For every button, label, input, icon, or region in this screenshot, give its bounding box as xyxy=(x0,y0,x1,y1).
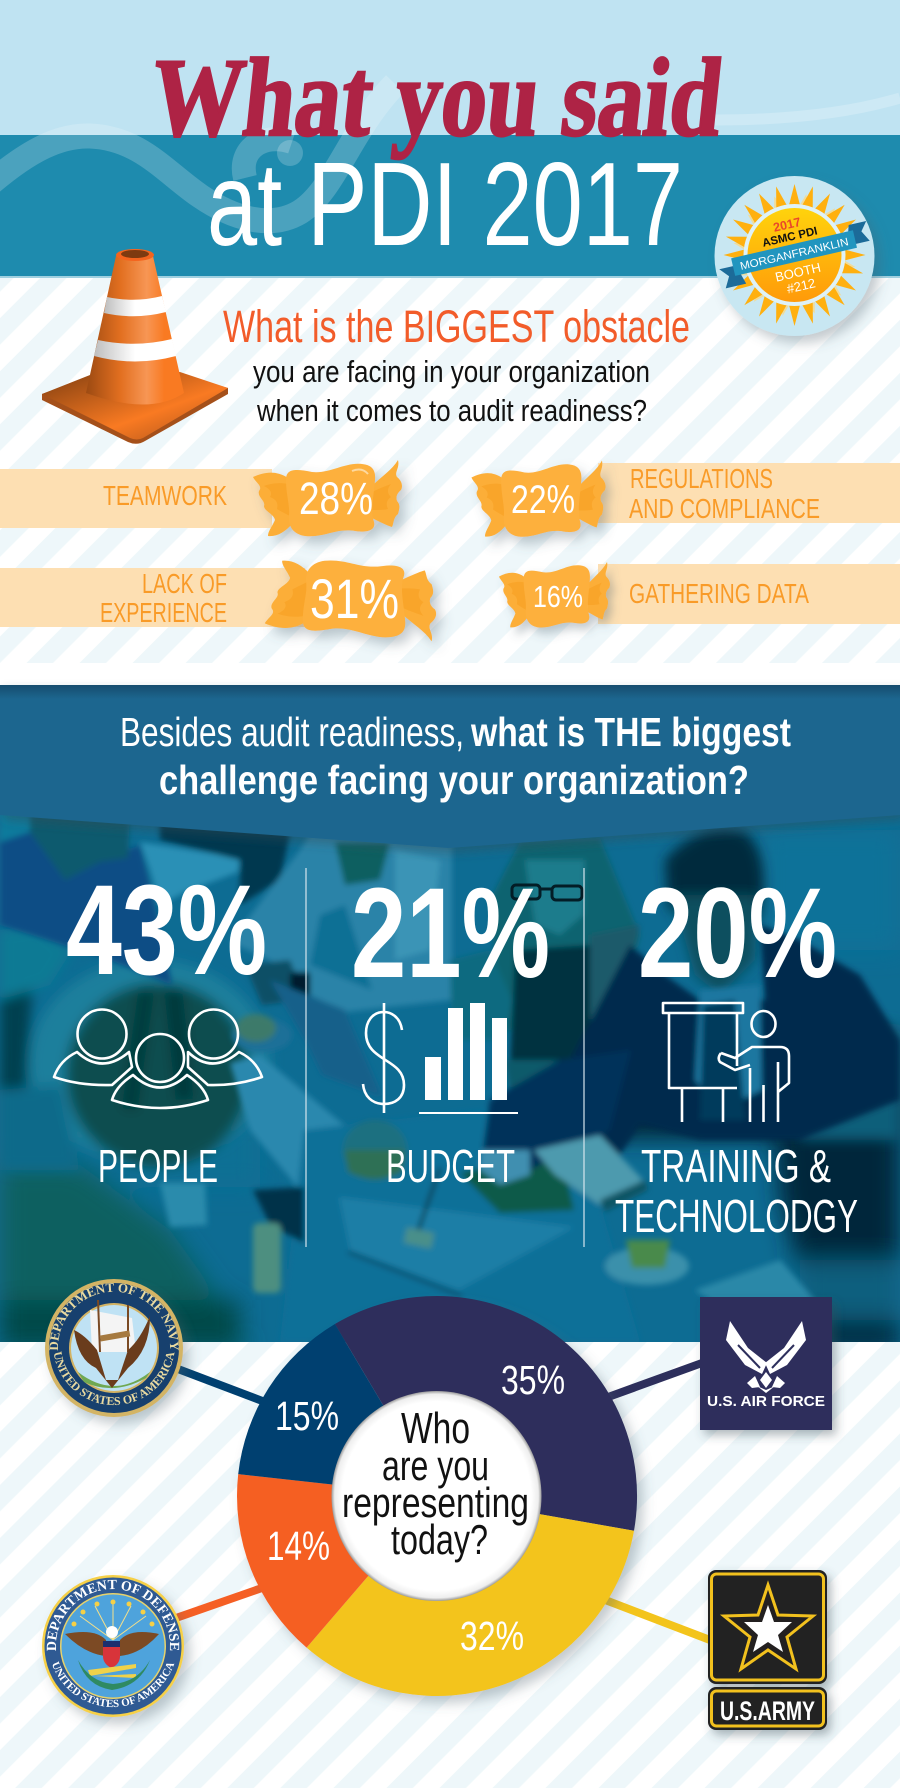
divider lines xyxy=(306,868,584,1247)
stat: 43% people: PEOPLE xyxy=(98,1140,218,1192)
stat: 21% budget: 21% xyxy=(351,862,550,1005)
badge: MorganFranklin booth sun: ASMC PDI xyxy=(761,225,819,250)
badge: MorganFranklin booth sun: BOOTH xyxy=(774,260,822,285)
table area xyxy=(280,1110,640,1342)
label: 15%: 15% xyxy=(275,1393,339,1439)
center question: today? xyxy=(391,1516,488,1563)
icon: traffic cone xyxy=(42,249,228,444)
label: 35%: 35% xyxy=(501,1357,565,1403)
connector: navy xyxy=(178,1369,265,1402)
logo: U.S. Air Force: U.S. AIR FORCE xyxy=(707,1393,825,1410)
bar: regulations and compliance 22%: REGULATIONS xyxy=(630,463,773,494)
stat: 21% budget: BUDGET xyxy=(386,1140,515,1192)
stat: 20% training and technology: 20% xyxy=(638,862,837,1005)
woman right xyxy=(490,838,640,1030)
badge: MorganFranklin booth sun: #212 xyxy=(785,275,817,296)
left dark sliver and cup xyxy=(253,1187,304,1243)
title: What you said: What you said xyxy=(145,36,728,160)
logo: Department of the Navy seal xyxy=(45,1279,194,1430)
icon: people xyxy=(54,1010,262,1108)
man head and right person xyxy=(665,829,764,920)
label: 14%: 14% xyxy=(267,1523,330,1569)
logo: U.S. Army xyxy=(708,1570,827,1730)
heading: biggest obstacle question xyxy=(223,301,690,428)
center question: are you xyxy=(382,1442,489,1489)
stat: 43% people xyxy=(54,859,267,1192)
bar: gathering data 16%: GATHERING DATA xyxy=(629,578,809,609)
bar: regulations and compliance 22%: 22% xyxy=(511,478,575,522)
label: 32%: 32% xyxy=(460,1613,524,1659)
panel: obstacle bars xyxy=(0,460,900,641)
heading: biggest obstacle question: you are facing in your organization xyxy=(253,354,650,389)
panel: challenge heading band xyxy=(0,685,900,848)
bar: teamwork 28%: TEAMWORK xyxy=(103,480,227,511)
connector: army xyxy=(600,1598,710,1640)
bar: teamwork 28% xyxy=(0,460,402,536)
laptop xyxy=(270,980,382,1097)
bar: lack of experience 31%: LACK OF xyxy=(142,568,227,599)
center question: Who xyxy=(401,1404,470,1453)
heading text: Besides audit readiness, xyxy=(120,709,464,755)
bar: regulations and compliance 22% xyxy=(471,460,900,537)
saucer and cup xyxy=(605,1247,689,1285)
bar: lack of experience 31%: 31% xyxy=(310,567,399,630)
bar: lack of experience 31%: EXPERIENCE xyxy=(100,597,227,628)
woman left in blue xyxy=(0,832,172,985)
stat: 21% budget xyxy=(351,862,550,1192)
suit xyxy=(574,922,900,1156)
panel: challenge heading band: challenge facing your organization? xyxy=(159,757,749,803)
bar: gathering data 16%: 16% xyxy=(533,579,583,614)
badge: MorganFranklin booth sun xyxy=(711,176,879,336)
plate xyxy=(232,1018,292,1052)
teapot xyxy=(343,1120,407,1180)
heading: biggest obstacle question: when it comes to audit readiness? xyxy=(256,393,647,428)
logo: Department of the Navy seal: DEPARTMENT OF THE NAVY xyxy=(49,1283,179,1350)
bar: gathering data 16% xyxy=(499,562,900,628)
title: at PDI 2017: at PDI 2017 xyxy=(207,138,683,271)
center question xyxy=(342,1404,529,1563)
stat: 43% people: 43% xyxy=(66,859,267,1002)
woman's glasses xyxy=(512,885,582,900)
green table and sleeve xyxy=(460,1161,576,1216)
icon: presenter at board xyxy=(663,1003,789,1122)
logo: U.S. Army: U.S.ARMY xyxy=(720,1696,815,1726)
right papers xyxy=(696,1259,814,1297)
stat: 20% training and technology: TRAINING & xyxy=(641,1140,831,1192)
logo: Department of Defense seal xyxy=(42,1575,196,1730)
heading: biggest obstacle question: What is the BIGGEST obstacle xyxy=(223,301,690,352)
center question: representing xyxy=(342,1479,529,1526)
divider strip xyxy=(0,663,900,686)
bar: teamwork 28%: 28% xyxy=(299,473,373,524)
panel: challenge heading band: what is THE biggest xyxy=(470,709,791,755)
connector: air force xyxy=(600,1363,702,1400)
soft background masses xyxy=(0,1058,900,1342)
bar: regulations and compliance 22%: AND COMPLIANCE xyxy=(629,493,820,524)
bar: lack of experience 31% xyxy=(0,560,436,641)
badge: MorganFranklin booth sun: 2017 xyxy=(772,215,802,235)
logo: Department of Defense seal: UNITED STATES OF AMERICA xyxy=(52,1661,174,1708)
badge: MorganFranklin booth sun: MORGANFRANKLIN xyxy=(739,236,850,273)
connector: defense xyxy=(176,1588,262,1618)
book xyxy=(534,1135,643,1205)
icon: dollar and bars xyxy=(363,1003,518,1113)
logo: U.S. Air Force xyxy=(700,1297,832,1430)
logo: Department of the Navy seal: UNITED STATES OF AMERICA xyxy=(54,1351,174,1406)
panel: photo background xyxy=(0,800,900,1350)
logo: Department of Defense seal: DEPARTMENT OF DEFENSE xyxy=(46,1580,180,1651)
header panel xyxy=(0,0,900,278)
chart: representation donut xyxy=(237,1296,637,1696)
blurred foreground head xyxy=(30,960,270,1164)
stat: 20% training and technology xyxy=(615,862,858,1242)
